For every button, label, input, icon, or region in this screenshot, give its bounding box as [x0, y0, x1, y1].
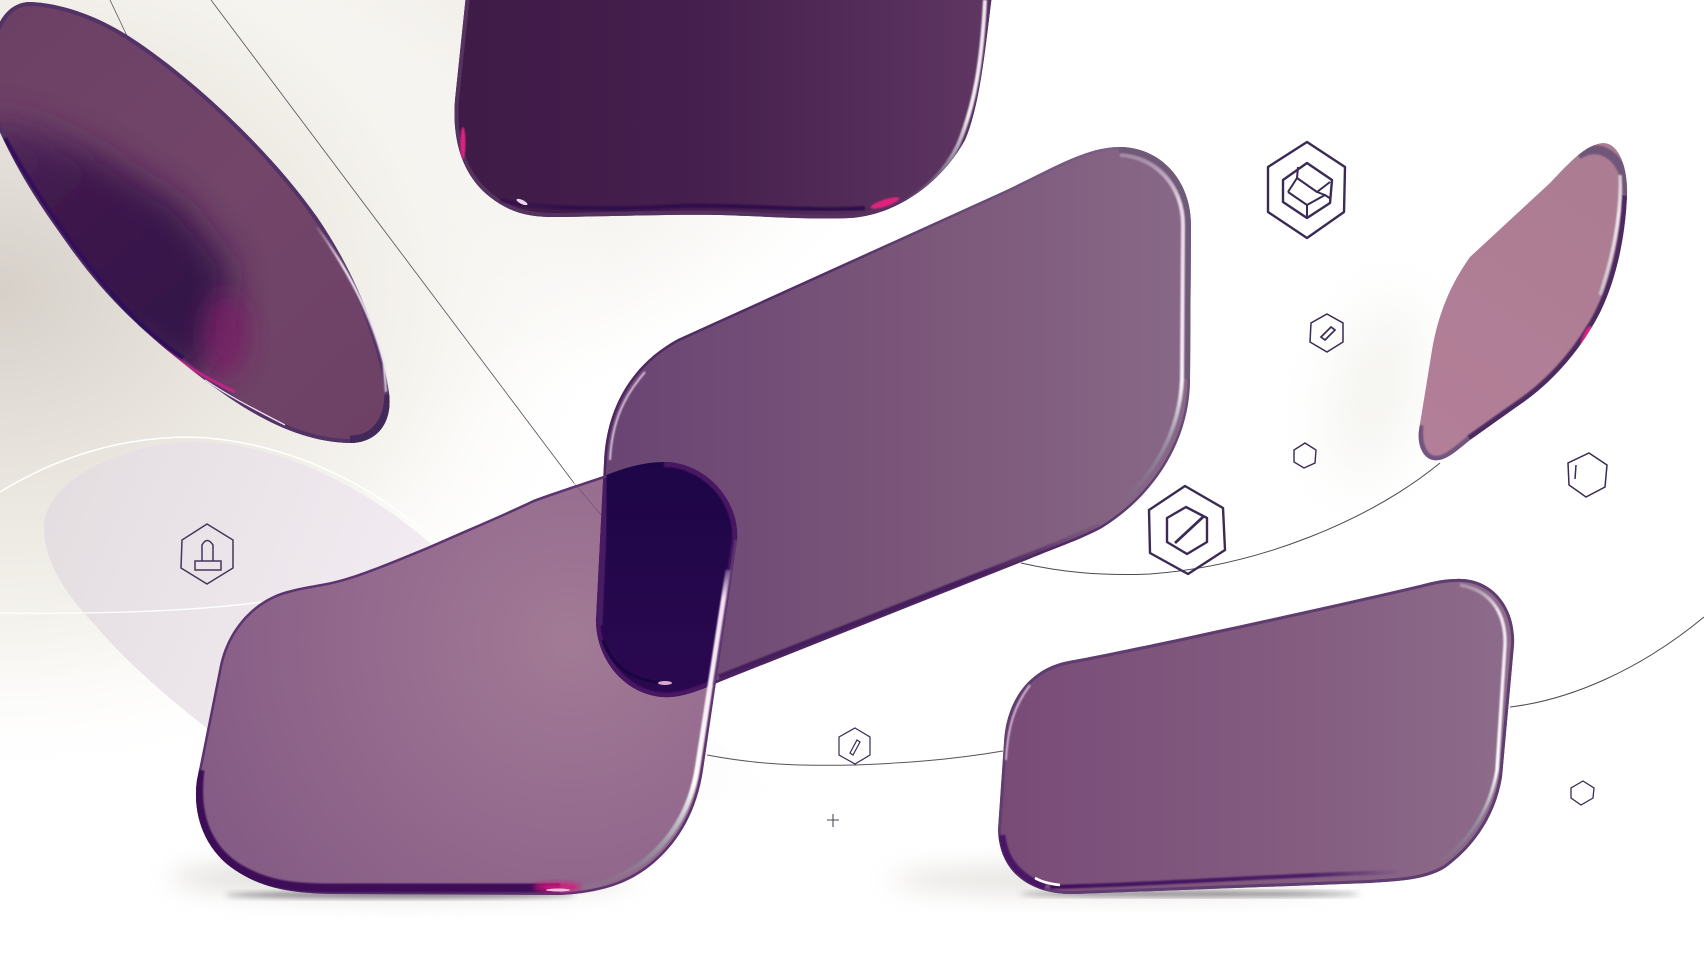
icon: large cube hexagon	[1268, 142, 1345, 238]
panel: right petal	[1419, 143, 1627, 460]
panel: top-left tilted ellipse	[0, 2, 390, 443]
panel: large central panel	[596, 147, 1191, 697]
icon: line hexagon	[1568, 453, 1607, 497]
connector line: left panel to right panel	[707, 751, 1003, 765]
connector line: long diagonal	[211, 0, 574, 483]
panel: lower-left large panel	[196, 455, 750, 895]
connector line: top left short	[110, 0, 128, 38]
white orbit lines	[0, 437, 436, 613]
panel: lower-right panel	[998, 579, 1514, 894]
icon: small empty hexagon	[1294, 443, 1316, 468]
connector line: center panel to right petal	[1021, 463, 1440, 575]
panel: top rounded dark panel	[454, 0, 992, 219]
icon: large slashed hexagon	[1149, 486, 1225, 574]
connector line: right panel to page edge	[1510, 617, 1704, 707]
icon: stylus hexagon	[839, 728, 870, 764]
icon: plus mark	[827, 814, 839, 827]
icon: pencil hexagon	[1310, 314, 1343, 352]
icon: small hexagon lower right	[1571, 781, 1594, 805]
icon: stamp hexagon	[181, 524, 233, 584]
ground shadow: left panel	[170, 858, 630, 898]
ground shadow: right panel	[890, 864, 1360, 896]
ghost translucent leaf shape	[44, 442, 790, 800]
overlap of central and lower-left panels	[596, 462, 738, 698]
